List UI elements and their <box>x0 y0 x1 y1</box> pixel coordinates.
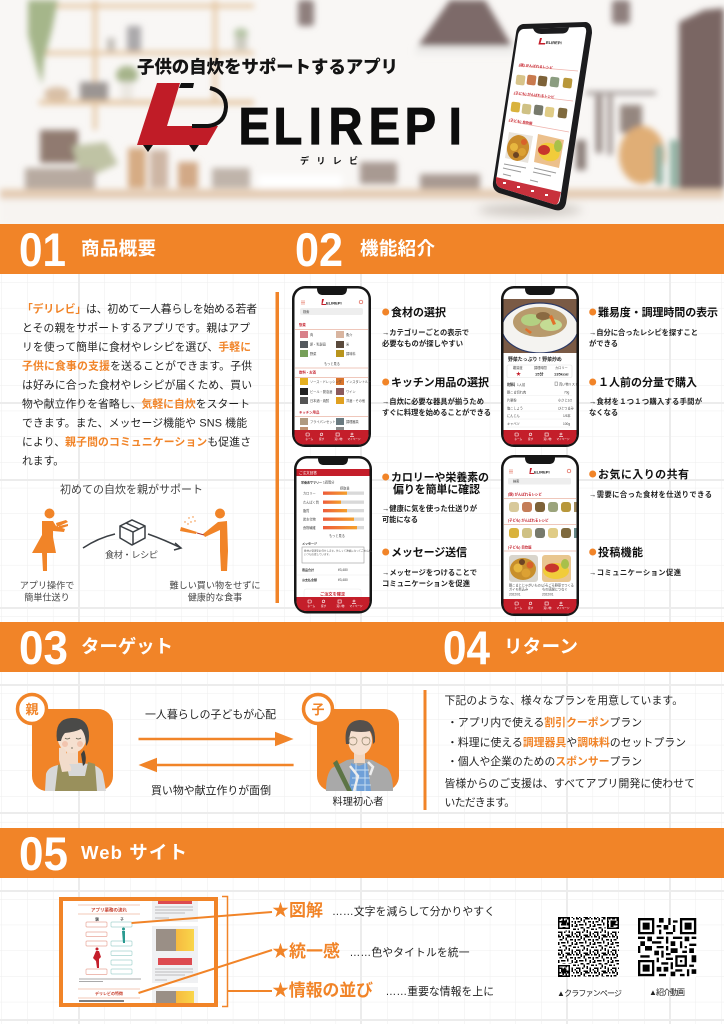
website screenshot: 親 <box>95 916 99 922</box>
logo: DELIREPI <box>137 83 462 166</box>
phone C: recipe detail: 片栗粉 <box>507 398 517 402</box>
hero phone food photos <box>505 132 564 168</box>
phone C: recipe detail: 135kcal <box>554 372 568 376</box>
feature: kitchen tools <box>382 375 491 417</box>
phone D: home screen: (子ども) 自炊飯 <box>508 544 532 550</box>
phone C: recipe detail: ひとつまみ <box>558 406 575 410</box>
phone C: recipe detail: 材料 <box>507 381 515 387</box>
panel: product overview text: 子供に食事の支援を送ることができます。子供 <box>22 358 252 372</box>
phone D: home screen: ELIREPI <box>534 470 550 474</box>
panel: product overview text: は好みに合った食材やレシピが届くため、買い <box>22 378 252 392</box>
feature: favourites: →需要に合った食材を仕送りできる <box>589 490 712 499</box>
phone shadow <box>478 204 582 216</box>
phone B: nutrition check: ご注文を確定 <box>320 590 346 598</box>
phone B: nutrition check: メッセージ <box>302 540 317 546</box>
hero phone row labels: (親) がんばれるレシピ <box>519 62 554 70</box>
section bar 03 and 04: リターン <box>504 636 578 657</box>
section bar 03 and 04: 04 <box>443 621 490 674</box>
callout: information order: ……重要な情報を上に <box>386 984 494 998</box>
callout: diagrams <box>272 901 495 920</box>
rail and utensils <box>586 92 656 94</box>
website screenshot: 子 <box>120 916 124 922</box>
panel: product overview text: 物や献立作りを省略し、気軽に自炊をスタート <box>22 396 250 410</box>
phone B: nutrition check: ¥3,480 <box>338 578 348 582</box>
phone D: home screen: ちの感謝につなぐ <box>542 586 568 592</box>
section bar 01 and 02: 01 <box>19 223 66 276</box>
panel: product overview text: により、親子間のコミュニケーションも促進さ <box>22 434 251 448</box>
phone C: recipe detail: ★ <box>516 372 521 378</box>
panel: product overview text: 「デリレビ」は、初めて一人暮らしを始める若者 <box>22 302 257 316</box>
feature: single serving: →食材を１つ１つ購入する手間が <box>589 397 703 406</box>
bracket and connector lines <box>132 896 272 1006</box>
hero phone row labels: (子ども) がんばれるレシピ <box>514 90 555 99</box>
phone A: ingredient selection: 米 <box>346 342 350 346</box>
counter <box>0 189 724 199</box>
phone B: nutrition check: ¥3,480 <box>338 568 348 572</box>
crowdfunding cards <box>152 901 198 1003</box>
phone A: ingredient selection: 惣菜 <box>299 322 306 327</box>
phone D: home screen: ガイモ煮込み <box>509 586 529 592</box>
panel: product overview text: れます。 <box>22 454 64 468</box>
feature: ingredient selection: 必要なものが探しやすい <box>382 339 463 348</box>
diagram: parent supports first cooking <box>20 482 260 602</box>
QR code: crowdfunding page: ▲クラファンページ <box>557 989 622 998</box>
phone B: nutrition check: 1週間分 <box>323 480 335 484</box>
phone C: recipe detail <box>501 286 579 447</box>
callout: information order <box>272 981 494 1000</box>
arrows between parent and child <box>138 707 294 797</box>
hero phone nav band <box>496 177 561 204</box>
section bar 01 and 02: 02 <box>295 223 343 276</box>
feature: nutrition: →健康に気を使った仕送りが <box>382 504 478 513</box>
phone C: recipe detail: 買い物リスト <box>559 382 578 386</box>
phone B: nutrition check <box>294 456 374 614</box>
phone B: nutrition check: 炭水化物 <box>303 516 317 522</box>
phone C: recipe detail: 100g <box>563 422 570 426</box>
logo: DELIREPI: デリレビ <box>300 155 358 166</box>
section bar 01 and 02 <box>0 223 724 276</box>
thumbnails <box>300 331 344 430</box>
panel: product overview text: とその親をサポートするアプリです。親はアプ <box>22 322 250 334</box>
phone A: ingredient selection: 洋酒・その他 <box>346 398 366 403</box>
phone A: ingredient selection: 飲料・お酒 <box>299 370 317 374</box>
phone A: ingredient selection: もっと見る <box>324 361 340 366</box>
divider 03/04 <box>424 690 426 810</box>
phone B: nutrition check: 脂質 <box>303 508 310 513</box>
section bar 03 and 04 <box>0 621 724 674</box>
phone C: recipe detail: 1人前 <box>517 382 526 387</box>
phone D: home screen: 検索 <box>513 478 519 484</box>
plant <box>28 0 58 85</box>
hero phone row labels: (子ども) 自炊飯 <box>509 117 533 126</box>
phone C: recipe detail: 豚こま切れ肉 <box>507 390 526 394</box>
hero phone mockup <box>493 22 592 210</box>
phone C: recipe detail: にんじん <box>507 413 521 418</box>
feature: message: コミュニケーションを促進 <box>382 579 471 588</box>
hero phone thumbnails <box>510 75 573 119</box>
phone A: ingredient selection: ワイン <box>346 389 356 394</box>
arrows between parent and child: 買い物や献立作りが面倒 <box>151 783 271 797</box>
icon: parent with phone <box>32 508 68 571</box>
phone A: ingredient selection: 日本酒・焼酎 <box>310 398 330 403</box>
panel: return plans: 下記のような、様々なプランを用意しています。 <box>444 693 683 707</box>
callout: diagrams: ★図解 <box>272 901 323 920</box>
phone D: home screen: (子ども) がんばれるレシピ <box>508 518 549 522</box>
logo in hero phone: ELIREPI <box>546 40 562 45</box>
feature: posting <box>589 545 682 577</box>
panel: return plans <box>444 693 695 809</box>
phone C: recipe detail: キャベツ <box>507 422 520 426</box>
callout: consistency: ★統一感 <box>272 941 340 961</box>
panel: product overview text <box>22 302 257 468</box>
feature: nutrition: カロリーや栄養素の <box>391 470 489 484</box>
hero tagline: 子供の自炊をサポートするアプリ <box>137 57 398 77</box>
feature: difficulty <box>589 305 718 348</box>
callout: diagrams: ……文字を減らして分かりやすく <box>332 904 495 918</box>
phone A: ingredient selection: インスタントルー <box>346 379 371 384</box>
panel: return plans: ・個人や企業のためのスポンサープラン <box>447 754 642 768</box>
diagram: parent supports first cooking: 難しい買い物をせずに <box>170 580 260 590</box>
panel: product overview text: リを使って簡単に食材やレシピを選び、手軽に <box>22 340 251 354</box>
feature: message: →メッセージをつけることで <box>382 568 477 577</box>
phone B: nutrition check: カロリー <box>303 490 316 496</box>
flow figures <box>93 928 125 968</box>
feature: single serving: １人前の分量で購入 <box>598 375 697 389</box>
QR code: intro video <box>638 918 696 997</box>
phone B: nutrition check: ご注文回答 <box>299 470 317 475</box>
phone C: recipe detail: 小さじ1/2 <box>558 398 572 402</box>
website screenshot: アプリ業務の流れ <box>91 906 127 914</box>
diagram: parent supports first cooking: 簡単仕送り <box>24 592 70 602</box>
panel: return plans: いただきます。 <box>444 796 515 809</box>
nutrition bars <box>323 492 364 529</box>
feature: ingredient selection <box>382 305 469 348</box>
feature: kitchen tools: すぐに料理を始めることができる <box>382 408 491 417</box>
phone B: nutrition check: 食物繊維 <box>303 525 317 530</box>
section bar 01 and 02: 機能紹介 <box>360 238 435 259</box>
phone B: nutrition check: たんぱく質 <box>303 500 320 504</box>
callout: information order: ★情報の並び <box>272 981 373 1000</box>
phone D: home screen: (親) がんばれるレシピ <box>508 492 542 496</box>
website screenshot <box>61 899 216 1005</box>
feature: ingredient selection: →カテゴリーごとの表示で <box>382 328 469 337</box>
phone C: recipe detail: 調理時間 <box>534 365 547 370</box>
phone D: home screen: ごろごろ野菜でつくる <box>542 582 574 588</box>
phone D: home screen <box>501 455 579 616</box>
phone A: ingredient selection: 野菜 <box>310 351 317 356</box>
shelves <box>39 0 254 130</box>
icon: child cooking <box>180 508 228 571</box>
feature: favourites <box>589 467 712 499</box>
hood <box>418 0 512 46</box>
feature: posting: 投稿機能 <box>598 545 643 559</box>
phone B: nutrition check: いつも応援しています。 <box>304 552 331 556</box>
items on lower shelf and counter <box>40 130 78 163</box>
food photos <box>509 555 571 582</box>
callout: consistency: ……色やタイトルを統一 <box>350 945 470 959</box>
badge: parent: 親 <box>25 702 39 717</box>
phone A: ingredient selection: 魚介 <box>346 332 353 337</box>
thumbnails <box>509 502 576 538</box>
phone C: recipe detail: 塩こしょう <box>507 406 523 410</box>
phone C: recipe detail: 野菜たっぷり！野菜炒め <box>508 356 562 363</box>
feature: nutrition: 可能になる <box>382 515 418 524</box>
phone B: nutrition check: お支払金額 <box>302 577 317 582</box>
phone B: nutrition check: 食材の管理をお任せします。忙しくて連絡になってごめんね。 <box>304 548 374 552</box>
lamps <box>298 0 314 26</box>
panel: child avatar <box>304 694 399 808</box>
phone C: recipe detail: 難易度 <box>513 365 523 370</box>
diagram: parent supports first cooking: 初めての自炊を親がサポート <box>60 482 203 496</box>
feature: ingredient selection: 食材の選択 <box>391 305 446 319</box>
website screenshot: デリレビの特徴 <box>95 990 123 996</box>
QR code: crowdfunding page <box>557 917 622 998</box>
phone D: home screen: 2022/01 <box>509 592 521 596</box>
feature: nutrition <box>382 470 489 524</box>
phone C: recipe detail: 15分 <box>535 370 543 376</box>
phone B: nutrition check: 摂取量 <box>340 486 350 490</box>
section bar 01 and 02: 商品概要 <box>81 238 156 259</box>
phone B: nutrition check: 商品合計 <box>302 567 314 572</box>
phone A: ingredient selection: 調味料 <box>346 351 356 356</box>
section bar 05 <box>0 827 724 880</box>
section bar 05: 05 <box>19 827 68 880</box>
diagram: parent supports first cooking: 食材・レシピ <box>105 549 158 560</box>
phone A: ingredient selection <box>292 286 371 447</box>
feature: difficulty: ができる <box>589 339 618 348</box>
feature: message: メッセージ送信 <box>391 545 467 559</box>
panel: product overview text: できます。また、メッセージ機能や SNS 機能 <box>22 416 247 430</box>
vertical divider 01/02 <box>276 292 279 603</box>
panel: parent avatar <box>18 694 113 791</box>
fridge <box>679 8 724 192</box>
phone A: ingredient selection: フライパンセット <box>310 419 336 424</box>
phone A: ingredient selection: ELIREPI <box>326 300 342 306</box>
feature: kitchen tools: キッチン用品の選択 <box>391 375 489 389</box>
section bar 05: Web サイト <box>81 842 187 863</box>
phone A: ingredient selection: ソース・ドレッシング <box>310 379 343 384</box>
feature: single serving <box>589 375 703 417</box>
phone D: home screen: 豚こまとじゃがいものレー <box>509 582 547 588</box>
arrow with box <box>83 520 181 550</box>
phone D: home screen: 2022/01 <box>542 592 554 596</box>
section bar 03 and 04: 03 <box>19 621 68 674</box>
feature: kitchen tools: →自炊に必要な器具が揃うため <box>382 397 484 406</box>
feature: message <box>382 545 477 588</box>
logo in hero phone <box>538 38 562 45</box>
QR code: intro video: ▲紹介動画 <box>649 987 685 997</box>
badge: child: 子 <box>311 702 325 717</box>
diagram: parent supports first cooking: 健康的な食事 <box>188 592 242 602</box>
logo: DELIREPI: ELIREPI <box>239 98 462 156</box>
phone A: ingredient selection: 肉 <box>310 332 313 337</box>
phone C: recipe detail: 70g <box>564 390 570 394</box>
phone C: recipe detail: 1/5本 <box>563 413 571 418</box>
arrows between parent and child: 一人暮らしの子どもが心配 <box>145 707 276 721</box>
flow boxes <box>86 922 132 974</box>
phone A: ingredient selection: キッチン用品 <box>299 410 320 414</box>
panel: return plans: 皆様からのご支援は、すべてアプリ開発に使わせて <box>444 776 695 790</box>
phone C: recipe detail: カロリー <box>555 365 568 370</box>
feature: difficulty: 難易度・調理時間の表示 <box>598 305 718 319</box>
hero: blurred kitchen photo <box>0 0 724 224</box>
phone A: ingredient selection: ビール・発泡酒 <box>310 389 333 394</box>
panel: return plans: ・料理に使える調理器具や調味料のセットプラン <box>447 735 686 749</box>
section bar 03 and 04: ターゲット <box>81 636 173 657</box>
phone A: ingredient selection: 調理器具 <box>346 419 360 424</box>
feature: favourites: お気に入りの共有 <box>598 467 689 481</box>
phone A: ingredient selection: 検索 <box>303 309 309 314</box>
panel: return plans: ・アプリ内で使える割引クーポンプラン <box>447 715 642 729</box>
feature: difficulty: →自分に合ったレシピを探すこと <box>589 328 698 337</box>
diagram: parent supports first cooking: アプリ操作で <box>20 580 74 590</box>
feature: posting: →コミュニケーション促進 <box>589 568 682 577</box>
phone A: ingredient selection: 卵・乳製品 <box>310 342 326 346</box>
phone B: nutrition check: もっと見る <box>329 533 345 538</box>
panel: child avatar: 料理初心者 <box>333 795 383 808</box>
callout: consistency <box>272 941 470 961</box>
phone B: nutrition check: 栄養素サマリー <box>301 480 322 484</box>
food photo <box>502 303 578 353</box>
feature: nutrition: 偏りを簡単に確認 <box>393 482 480 496</box>
feature: single serving: なくなる <box>589 408 618 417</box>
hero phone row labels <box>509 62 555 126</box>
